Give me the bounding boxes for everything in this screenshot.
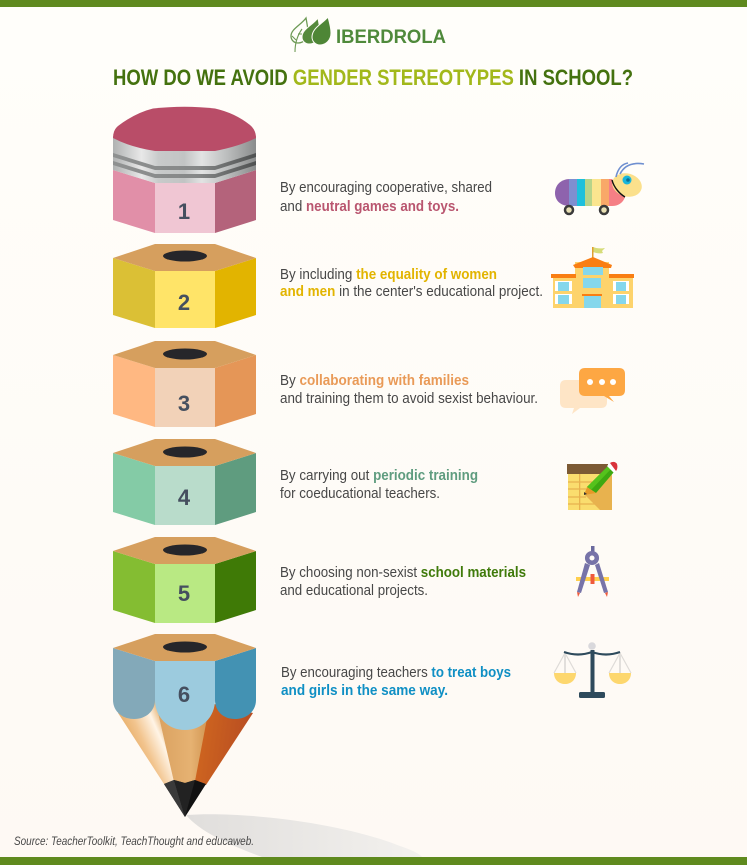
text 5: and educational projects. — [280, 583, 428, 599]
text 6: By encouraging teachers to treat boys — [281, 665, 511, 681]
segment 1: eraser — [113, 107, 256, 233]
text 3 — [280, 373, 538, 407]
logo: Iberdrola — [291, 17, 446, 52]
text 3: By collaborating with families — [280, 373, 469, 389]
icon: speech bubbles — [560, 368, 625, 414]
text 6: and girls in the same way. — [281, 683, 448, 699]
text 4 — [280, 468, 478, 502]
segment 6: blue with pencil tip: 6 — [178, 682, 190, 707]
segment 3: peach: 3 — [178, 391, 190, 416]
text 4: By carrying out periodic training — [280, 468, 478, 484]
text 1: By encouraging cooperative, shared — [280, 180, 492, 196]
icon: compass — [576, 546, 609, 597]
icon: school building — [551, 247, 634, 308]
text 2: and men in the center's educational project. — [280, 284, 543, 300]
segment 4: mint — [113, 439, 256, 525]
pencil — [113, 107, 256, 817]
text 6 — [281, 665, 511, 699]
icon: balance scales — [554, 642, 631, 698]
icon: caterpillar toy — [555, 163, 644, 214]
text 2: By including the equality of women — [280, 267, 497, 283]
segment 4: mint: 4 — [178, 485, 191, 510]
segment 6: blue with pencil tip — [113, 634, 256, 817]
text 1 — [280, 180, 492, 215]
segment 5: green: 5 — [178, 581, 190, 606]
segment 1: eraser: 1 — [178, 199, 190, 224]
icon: notepad and pencil — [567, 462, 617, 510]
logo: Iberdrola: IBERDROLA — [336, 27, 446, 48]
text 2 — [280, 267, 543, 300]
shadow of pencil — [186, 814, 422, 857]
segment 2: yellow: 2 — [178, 290, 190, 315]
text 5 — [280, 565, 526, 599]
segment 2: yellow — [113, 244, 256, 328]
segment 3: peach — [113, 341, 256, 427]
text 4: for coeducational teachers. — [280, 486, 440, 502]
source note: Source: TeacherToolkit, TeachThought and educaweb. — [14, 836, 254, 848]
title: HOW DO WE AVOID GENDER STEREOTYPES IN SCHOOL? — [113, 65, 633, 90]
text 3: and training them to avoid sexist behaviour. — [280, 391, 538, 407]
text 1: and neutral games and toys. — [280, 199, 459, 215]
segment 5: green — [113, 537, 256, 623]
text 5: By choosing non-sexist school materials — [280, 565, 526, 581]
